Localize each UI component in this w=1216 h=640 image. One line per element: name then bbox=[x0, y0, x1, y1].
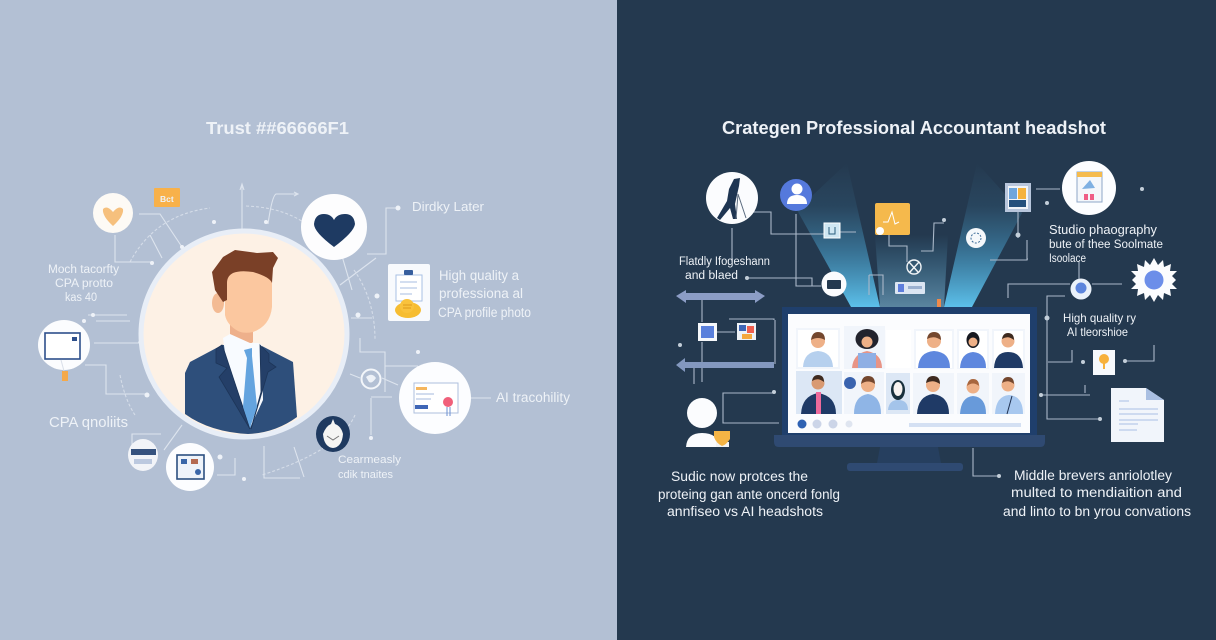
icon: picture frame bbox=[1005, 183, 1031, 212]
icon: picture tile bbox=[737, 323, 756, 340]
arrow: left bbox=[676, 358, 774, 372]
label: moch tacorfty: CPA protto bbox=[55, 278, 113, 290]
label: studio photography: Studio phaography bbox=[1049, 222, 1157, 237]
label: high quality: professiona al bbox=[439, 286, 523, 301]
icon: screen circle bbox=[38, 320, 90, 381]
neck bbox=[230, 322, 253, 350]
icon: certificate card bbox=[388, 264, 430, 321]
shirt collar bbox=[223, 334, 263, 428]
person tile 8 bbox=[888, 380, 908, 410]
top row tile backgrounds bbox=[796, 326, 1025, 369]
person tile 2 bbox=[852, 329, 882, 368]
lapels bbox=[216, 345, 276, 429]
label: dirdky later: Dirdky Later bbox=[412, 199, 485, 214]
suit jacket bbox=[185, 345, 297, 434]
monitor bbox=[774, 307, 1045, 471]
icon: sunburst bbox=[1131, 258, 1177, 302]
heading: right title: Crategen Professional Accountant headshot bbox=[722, 118, 1106, 138]
label: moch tacorfty: kas 40 bbox=[65, 292, 97, 304]
monitor stand bbox=[877, 447, 941, 463]
icon: big heart bbox=[301, 194, 367, 260]
label: cearmeasly bbox=[338, 454, 402, 481]
text: bottom left: proteing gan ante oncerd fonlg bbox=[658, 487, 840, 502]
label: ai tracohility: AI tracohility bbox=[496, 390, 570, 405]
portrait circle bbox=[141, 231, 347, 437]
label: high quality: CPA profile photo bbox=[438, 305, 531, 320]
text: bottom left: Sudic now protces the bbox=[671, 469, 808, 484]
person tile 7 bbox=[844, 376, 881, 414]
connector lines: left bbox=[85, 184, 491, 478]
label: moch tacorfty bbox=[48, 264, 119, 304]
icon: photographer circle bbox=[706, 172, 758, 224]
text: bottom right: and linto to bn yrou convations bbox=[1003, 504, 1191, 519]
person tile 5 bbox=[994, 333, 1023, 368]
person tile 9 bbox=[917, 376, 949, 414]
label: flatdly: and blaed bbox=[685, 270, 738, 282]
label: studio photography bbox=[1049, 222, 1163, 265]
headshot grid bbox=[796, 326, 1025, 414]
label: cearmeasly: cdik tnaites bbox=[338, 469, 393, 481]
ear bbox=[212, 293, 224, 313]
panel: trust portrait bbox=[38, 118, 570, 491]
heading: left title: Trust ##66666F1 bbox=[206, 118, 349, 138]
bottom row tile backgrounds bbox=[796, 371, 1025, 414]
icon: person with badge bbox=[686, 398, 730, 447]
icon: dashboard circle bbox=[166, 443, 214, 491]
screen controls bbox=[798, 420, 1021, 428]
label: high quality ai: AI tleorshioe bbox=[1067, 325, 1128, 339]
text: bottom right bbox=[1003, 468, 1191, 519]
tie bbox=[243, 348, 257, 428]
person tile 3 bbox=[918, 332, 950, 368]
person tile 10 bbox=[960, 379, 986, 414]
icon: team badge bbox=[780, 179, 812, 211]
label: moch tacorfty: Moch tacorfty bbox=[48, 264, 119, 276]
text: bottom left bbox=[658, 469, 840, 519]
icon: small camera bbox=[822, 272, 846, 296]
connector lines: right bbox=[694, 189, 1154, 476]
label: flatdly: Flatdly Ifogeshann bbox=[679, 256, 770, 268]
panel: left background bbox=[0, 0, 617, 640]
icon: AI board circle bbox=[399, 362, 471, 434]
screen bbox=[788, 314, 1030, 433]
arrow: double bbox=[676, 290, 765, 303]
label: cpa qnoliits: CPA qnoliits bbox=[49, 415, 128, 431]
face bbox=[225, 266, 272, 333]
label: flatdly bbox=[679, 256, 770, 282]
icon: bulb card bbox=[1093, 350, 1115, 375]
icon: small ring bbox=[362, 370, 380, 388]
icon: orange tag: Bct bbox=[160, 194, 174, 204]
icon: small square bbox=[824, 223, 840, 238]
person tile 6 bbox=[801, 375, 836, 414]
icon: pill bbox=[895, 282, 925, 294]
text: bottom right: multed to mendiaition and bbox=[1011, 485, 1182, 500]
panel: professional headshot bbox=[658, 118, 1191, 519]
monitor foot bbox=[847, 463, 963, 471]
icon: ring circle bbox=[966, 228, 986, 248]
connector nodes: right bbox=[678, 187, 1144, 478]
panel: right background bbox=[617, 0, 1216, 640]
person tile 1 bbox=[803, 332, 833, 367]
label: cearmeasly: Cearmeasly bbox=[338, 454, 402, 466]
icon: orange chart bbox=[875, 203, 910, 235]
text: bottom left: annfiseo vs AI headshots bbox=[667, 504, 823, 519]
label: studio photography: bute of thee Soolmate bbox=[1049, 239, 1163, 251]
icon: network bbox=[907, 260, 921, 274]
label: high quality bbox=[438, 268, 531, 320]
icon: small document circle bbox=[128, 439, 158, 471]
icon: orange marker bbox=[937, 299, 941, 307]
monitor base bar bbox=[774, 435, 1045, 447]
person tile 4 bbox=[960, 332, 986, 368]
label: high quality ai: High quality ry bbox=[1063, 311, 1136, 325]
icon: dark mask circle bbox=[316, 416, 350, 452]
hair bbox=[212, 250, 278, 302]
text: bottom right: Middle brevers anriolotley bbox=[1014, 468, 1172, 483]
label: high quality ai bbox=[1063, 311, 1136, 339]
person tile 11 bbox=[995, 377, 1023, 414]
person headshot bbox=[185, 250, 297, 434]
icon: document bbox=[1111, 388, 1164, 442]
monitor bezel bbox=[782, 307, 1037, 437]
light beams bbox=[797, 163, 1022, 307]
label: high quality: High quality a bbox=[439, 268, 519, 283]
label: studio photography: Isoolace bbox=[1049, 253, 1086, 265]
icon: blue square bbox=[698, 323, 717, 341]
connector nodes: left bbox=[82, 206, 420, 481]
icon: small heart bbox=[93, 193, 133, 233]
icon: chat badge bbox=[1070, 278, 1092, 300]
icon: orange tag bbox=[154, 188, 180, 207]
icon: calendar circle bbox=[1062, 161, 1116, 215]
